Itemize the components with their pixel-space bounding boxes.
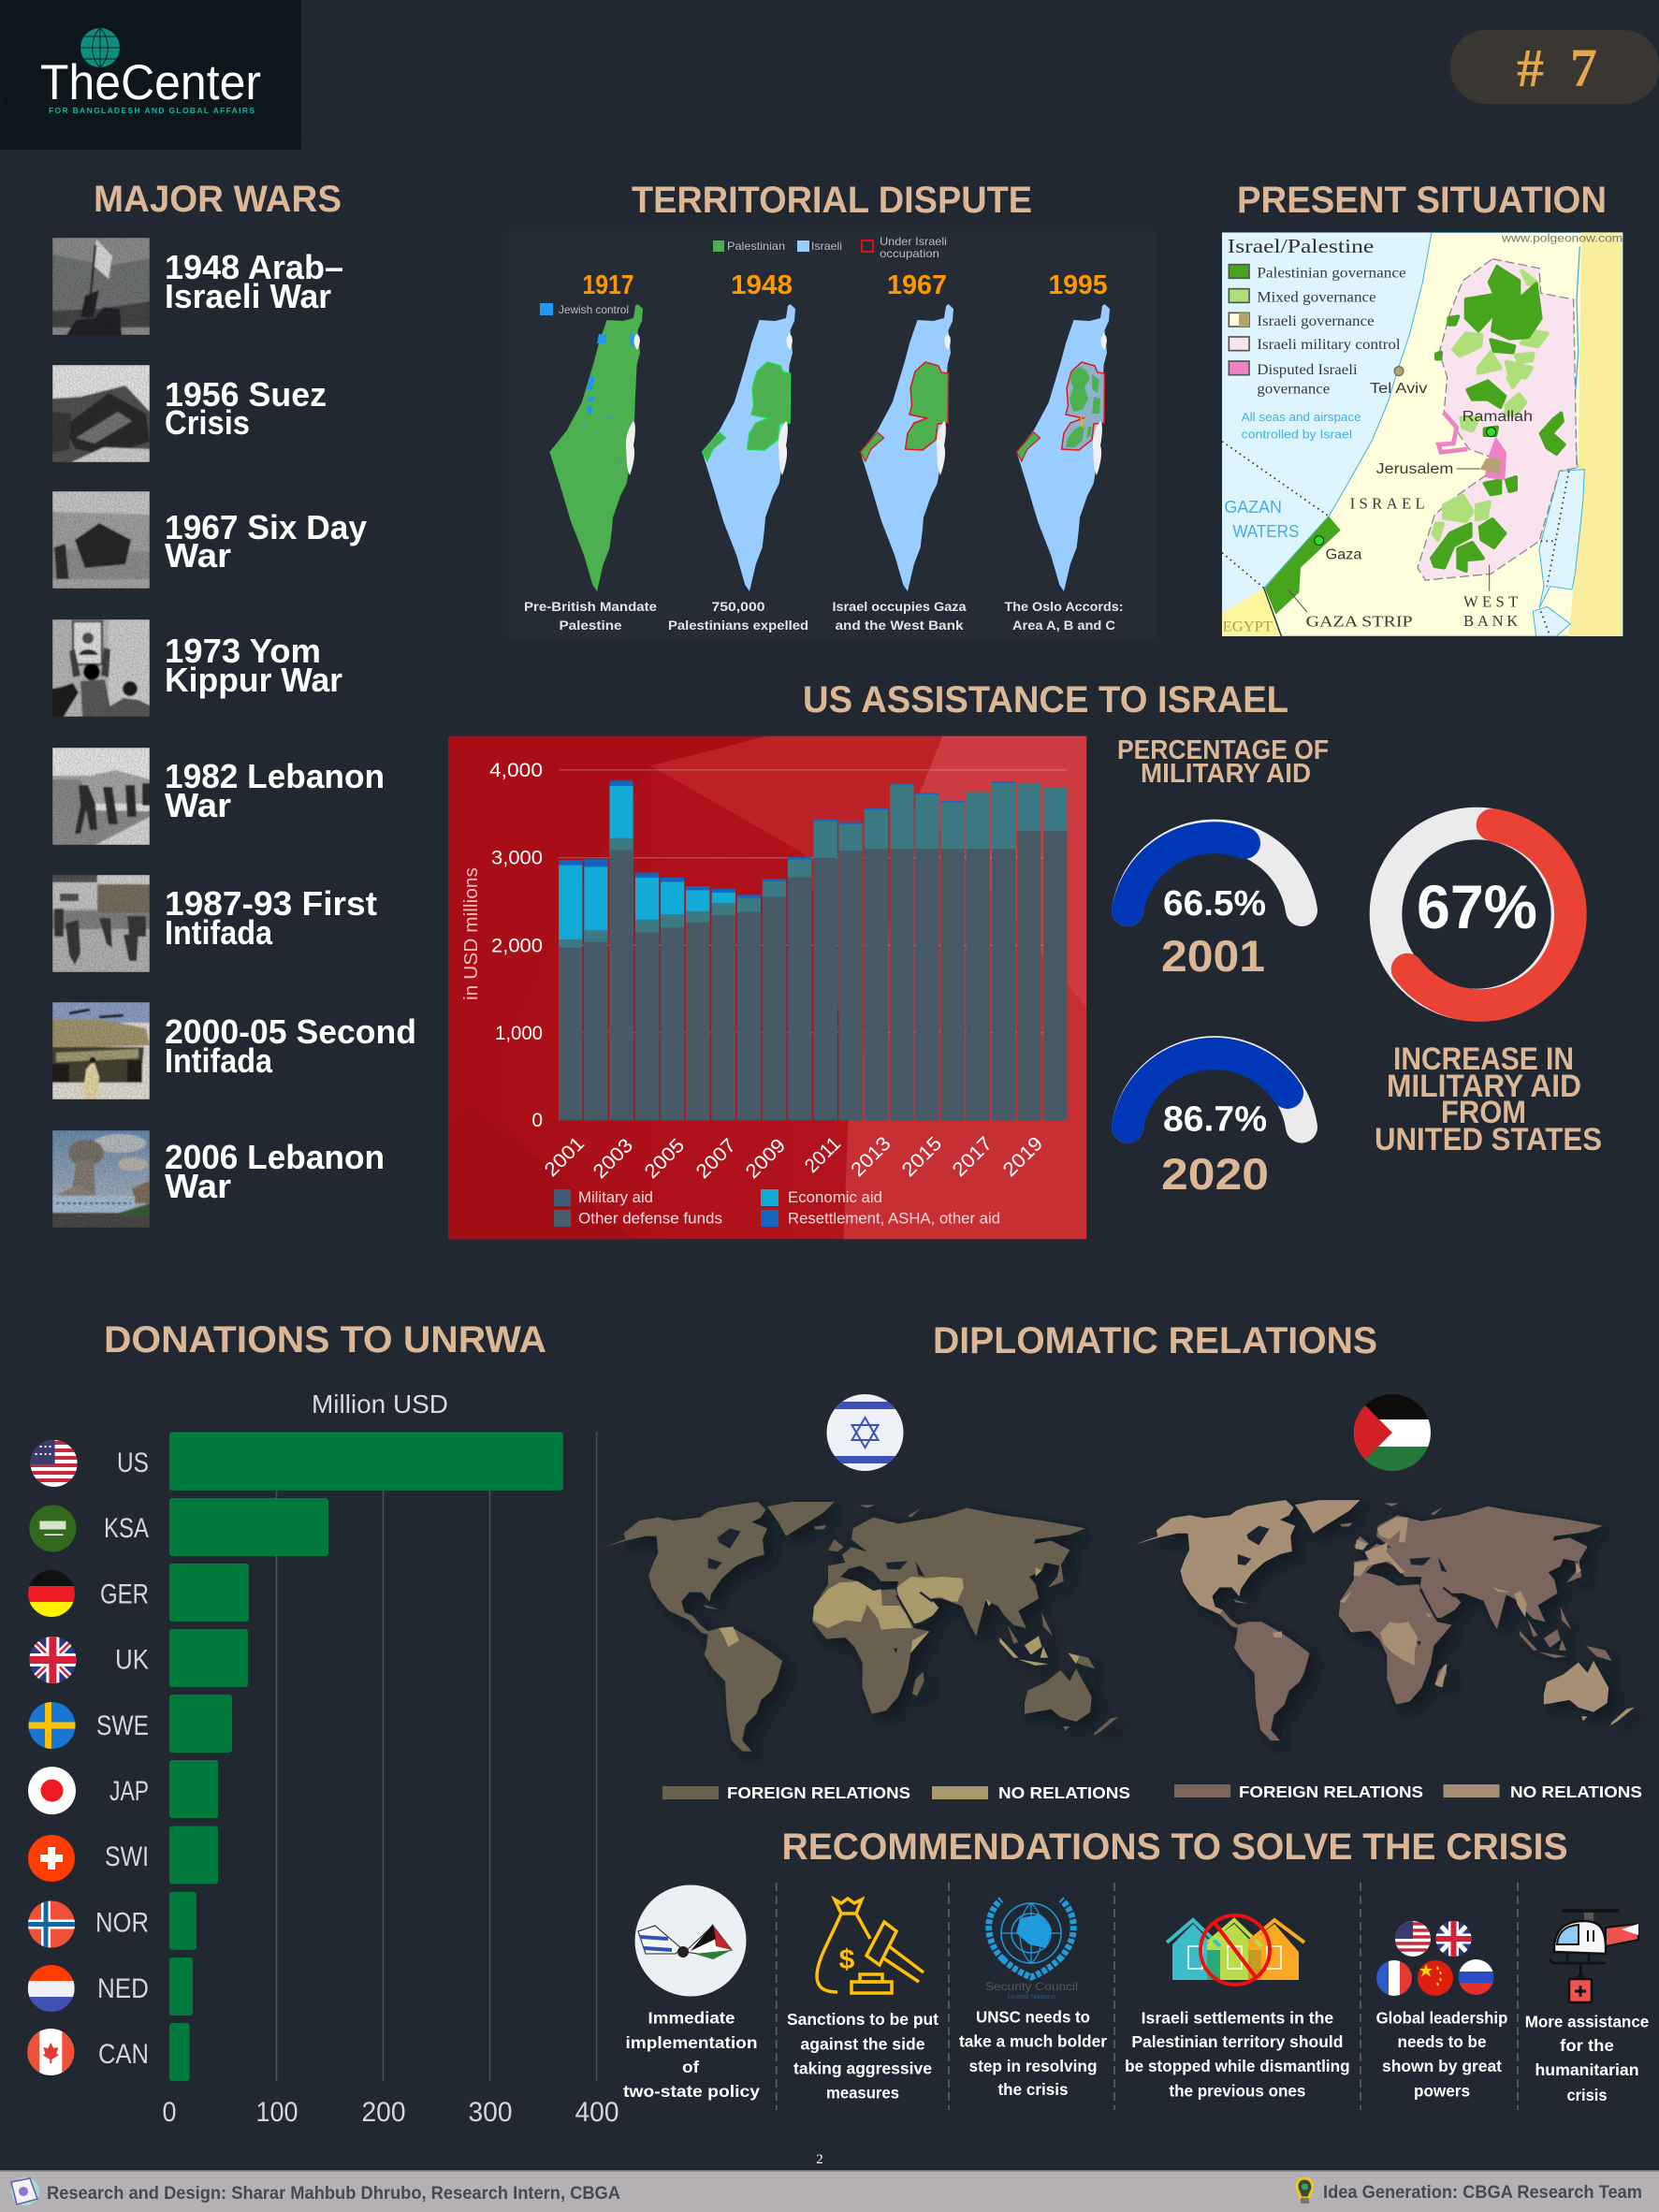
recommendation 5: global leadership [1376, 1921, 1507, 2101]
flag: Germany [28, 1570, 75, 1618]
world map: Israel relations [602, 1502, 1118, 1752]
flag: Sweden [28, 1702, 75, 1749]
chart axis labels: 2003 [589, 1135, 637, 1183]
war 2006: War [165, 1167, 231, 1205]
chart axis labels: 1,000 [495, 1023, 543, 1044]
map labels: WEST [1463, 593, 1518, 611]
map labels: Gaza [1326, 546, 1362, 562]
war 1987-93: 1987-93 First [165, 884, 377, 923]
map 1967: and the West Bank [835, 618, 964, 633]
map labels: Ramallah [1463, 409, 1533, 425]
map labels: Jerusalem [1376, 461, 1453, 477]
gauge: 2020: 2020 [1161, 1149, 1269, 1199]
icon: UN emblem: United Nations [1008, 1994, 1056, 2001]
heading: donations: DONATIONS TO UNRWA [104, 1319, 546, 1361]
recommendation 1: two-state policy: implementation [625, 2033, 758, 2052]
chart legend [554, 1188, 1000, 1228]
flag: Canada [27, 2029, 74, 2075]
gauge: 2001: 2001 [1161, 931, 1265, 981]
map 1967: 1967 [887, 270, 947, 300]
heading: present situation: PRESENT SITUATION [1237, 180, 1607, 221]
heading: major wars: MAJOR WARS [94, 179, 342, 220]
map 1917: Palestine [560, 618, 622, 633]
chart axis labels: 0 [531, 1110, 543, 1131]
chart legend: Economic aid [788, 1188, 882, 1206]
war 1982: War [165, 786, 231, 824]
issue badge [1450, 30, 1659, 104]
recommendation 2: sanctions: measures [826, 2084, 899, 2103]
logo: The Center: FOR BANGLADESH AND GLOBAL AFFAIRS [49, 106, 255, 115]
chart axis labels: 4,000 [489, 760, 543, 781]
recommendation 5: global leadership: shown by great [1382, 2057, 1502, 2075]
flag: Norway [28, 1901, 75, 1948]
country labels: CAN [98, 2039, 149, 2070]
map 1948: 1948 [731, 270, 793, 300]
map 1995 [1005, 270, 1123, 633]
caption: increase in military aid: MILITARY AID [1387, 1069, 1581, 1104]
recommendation 4: settlements: be stopped while dismantling [1125, 2057, 1350, 2075]
map labels [1223, 231, 1623, 634]
chart axis labels: 2019 [999, 1133, 1047, 1181]
war 2006 [52, 1130, 385, 1228]
map labels: Palestinian governance [1257, 266, 1406, 282]
icon: great power flags [1376, 1921, 1493, 1996]
war 1982 [52, 748, 385, 845]
icon: UN emblem [985, 1899, 1078, 2001]
map labels: GAZA STRIP [1306, 612, 1413, 630]
chart legend: Military aid [578, 1188, 653, 1206]
country labels: KSA [104, 1513, 149, 1544]
icon: UN emblem: Security Council [985, 1980, 1078, 1993]
war 1948 [52, 238, 343, 335]
map labels: controlled by Israel [1242, 429, 1352, 442]
map 1948 [668, 270, 808, 633]
chart axis labels [461, 760, 1047, 1183]
tick labels: 300 [468, 2097, 513, 2128]
legend: Palestine relations [1174, 1783, 1642, 1801]
chart axis labels: 2017 [949, 1133, 997, 1181]
flag: Japan [28, 1767, 76, 1814]
panel: territorial dispute maps [508, 231, 1156, 638]
war 1967 [52, 491, 367, 589]
recommendation 3: UNSC: step in resolving [969, 2057, 1097, 2075]
flag: Netherlands [28, 1965, 75, 2013]
logo: The Center: TheCenter [40, 55, 261, 110]
recommendation 1: two-state policy [623, 1885, 760, 2101]
recommendation 1: two-state policy: two-state policy [623, 2082, 760, 2101]
donut: 67 percent increase: 67% [1417, 872, 1537, 941]
issue badge: # 7 [1517, 37, 1597, 98]
subheading: percentage of military aid: PERCENTAGE OF [1117, 735, 1329, 765]
recommendation 4: settlements: Israeli settlements in the [1142, 2009, 1333, 2028]
recommendation 5: global leadership: Global leadership [1376, 2009, 1507, 2028]
flag: US [31, 1440, 78, 1487]
chart axis labels: 2001 [541, 1133, 589, 1181]
legend swatches [1229, 265, 1249, 375]
map labels: EGYPT [1223, 618, 1273, 634]
map 1995: The Oslo Accords: [1005, 600, 1123, 614]
war 1956: Crisis [165, 403, 250, 442]
flag: Palestine [1354, 1394, 1431, 1472]
recommendation 3: UNSC: take a much bolder [959, 2032, 1107, 2051]
caption: increase in military aid: INCREASE IN [1393, 1041, 1574, 1077]
war 1948: 1948 Arab– [165, 248, 343, 286]
recommendation 3: UNSC: UNSC needs to [976, 2008, 1090, 2027]
country labels [95, 1448, 149, 2070]
war 1956: 1956 Suez [165, 375, 327, 414]
legend: Israel relations: FOREIGN RELATIONS [727, 1783, 910, 1802]
flag: UK [29, 1637, 76, 1683]
recommendation 4: settlements: the previous ones [1169, 2082, 1306, 2101]
gauge: 2001 [1128, 836, 1302, 981]
caption: increase in military aid: UNITED STATES [1375, 1122, 1602, 1157]
map labels: Israeli governance [1257, 313, 1375, 329]
tick labels: 400 [575, 2097, 619, 2128]
legend: Palestine relations: FOREIGN RELATIONS [1239, 1783, 1423, 1801]
map labels: governance [1257, 381, 1331, 397]
legend: Palestine relations: NO RELATIONS [1510, 1783, 1642, 1801]
icon: helicopter with aid box [1550, 1911, 1638, 2002]
map labels: GAZAN [1224, 497, 1282, 517]
icon: money bag and gavel [817, 1899, 924, 1993]
recommendation 3: UNSC: the crisis [997, 2080, 1069, 2099]
war 1967: 1967 Six Day [165, 508, 367, 546]
map 1967: Israel occupies Gaza [833, 600, 967, 614]
caption: increase in military aid: FROM [1441, 1095, 1526, 1130]
country labels: GER [100, 1579, 149, 1609]
map labels: Disputed Israeli [1257, 362, 1358, 378]
world map: Palestine relations [1135, 1500, 1635, 1740]
gauge: 2001: 66.5% [1163, 884, 1266, 924]
map labels: All seas and airspace [1242, 411, 1361, 424]
map: present situation [1222, 231, 1623, 636]
legend: Israel relations: NO RELATIONS [998, 1783, 1130, 1802]
recommendation 1: two-state policy: Immediate [648, 2009, 735, 2028]
page number: 2 [816, 2152, 823, 2167]
footer: Research and Design: Sharar Mahbub Dhrubo, Research Intern, CBGA [47, 2184, 620, 2204]
map labels: Tel Aviv [1370, 381, 1428, 397]
map 1948: Palestinians expelled [668, 618, 808, 633]
chart axis labels: 2007 [692, 1135, 740, 1183]
recommendation 6: humanitarian assistance: humanitarian [1535, 2060, 1639, 2079]
recommendation 3: UNSC [959, 1899, 1107, 2099]
flag: Saudi Arabia [29, 1505, 76, 1551]
tick labels: 100 [256, 2097, 298, 2128]
caption: increase in military aid [1375, 1041, 1602, 1157]
recommendation 6: humanitarian assistance: crisis [1566, 2086, 1608, 2104]
country labels: NOR [95, 1907, 149, 1939]
bars [169, 1432, 563, 2081]
flag: Israel [827, 1394, 904, 1471]
map 1917 [524, 270, 658, 633]
map legend [713, 235, 947, 260]
war 1982: 1982 Lebanon [165, 757, 385, 795]
chart: us assistance stacked bars [448, 736, 1086, 1239]
recommendation 2: sanctions: Sanctions to be put [787, 2010, 939, 2029]
war 2000-05 [52, 1002, 416, 1099]
subheading: percentage of military aid: MILITARY AID [1141, 759, 1311, 789]
recommendation 6: humanitarian assistance: More assistance [1525, 2013, 1650, 2031]
recommendation 5: global leadership: powers [1414, 2082, 1470, 2101]
recommendation 2: sanctions: taking aggressive [793, 2059, 932, 2078]
map labels: www.polgeonow.com [1501, 231, 1623, 244]
donut: 67 percent increase [1386, 823, 1570, 1006]
recommendation 2: sanctions [787, 1899, 939, 2103]
map labels: Mixed governance [1257, 290, 1376, 306]
map labels: Israeli military control [1257, 337, 1401, 353]
footer [0, 2170, 1659, 2212]
war 1956 [52, 365, 327, 462]
war 1948: Israeli War [165, 277, 331, 315]
map legend: Under Israeli [880, 235, 947, 248]
war 1967: War [165, 536, 231, 575]
chart axis labels: in USD millions [461, 867, 482, 1000]
chart axis labels: 2005 [641, 1135, 689, 1183]
map labels: Israel/Palestine [1228, 237, 1374, 257]
recommendation 4: settlements [1125, 1915, 1350, 2101]
gauge: 2020: 86.7% [1163, 1100, 1267, 1140]
map labels: WATERS [1232, 521, 1299, 541]
war 1987-93: Intifada [165, 913, 273, 952]
chart axis labels: 2013 [847, 1133, 895, 1181]
map 1948: 750,000 [711, 600, 765, 614]
tick labels: 200 [361, 2097, 406, 2128]
icon: houses with prohibition sign [1167, 1915, 1304, 1985]
country labels: JAP [109, 1776, 149, 1807]
icon: handshake flags [634, 1885, 747, 1997]
recommendation 5: global leadership: needs to be [1398, 2032, 1487, 2051]
subheading: percentage of military aid [1117, 735, 1329, 789]
icon: report [11, 2177, 39, 2205]
recommendation 1: two-state policy: of [682, 2058, 699, 2076]
chart: donations to UNRWA: Million USD [312, 1390, 448, 1419]
map 1967 [833, 270, 967, 633]
war 1987-93 [52, 875, 377, 972]
map 1995: 1995 [1048, 270, 1108, 300]
map 1917: Pre-British Mandate [524, 600, 658, 614]
war 2000-05: Intifada [165, 1041, 273, 1080]
war 1973: 1973 Yom [165, 632, 321, 670]
chart: donations to UNRWA [27, 1390, 619, 2128]
tick labels: 0 [163, 2097, 176, 2128]
map legend: Israeli [811, 240, 842, 253]
war 1973: Kippur War [165, 661, 342, 699]
footer: Idea Generation: CBGA Research Team [1323, 2183, 1642, 2203]
war 1973 [52, 619, 342, 717]
map 1917: Jewish control [559, 303, 629, 316]
war 2000-05: 2000-05 Second [165, 1012, 416, 1051]
chart axis labels: 2009 [742, 1135, 790, 1183]
recommendation 6: humanitarian assistance: for the [1560, 2036, 1614, 2055]
panel: major wars list [52, 238, 416, 1228]
heading: territorial dispute: TERRITORIAL DISPUTE [632, 180, 1032, 221]
chart axis labels: 2,000 [491, 936, 543, 956]
map legend: occupation [880, 247, 939, 260]
recommendation 4: settlements: Palestinian territory should [1131, 2032, 1343, 2051]
map 1917: 1917 [582, 270, 634, 300]
country labels: SWE [96, 1710, 149, 1741]
country labels: US [117, 1448, 149, 1478]
chart legend: Other defense funds [578, 1209, 722, 1228]
heading: diplomatic relations: DIPLOMATIC RELATIONS [933, 1320, 1377, 1361]
map labels: BANK [1463, 612, 1518, 630]
heading: recommendations: RECOMMENDATIONS TO SOLVE THE CRISIS [782, 1826, 1568, 1868]
legend: Israel relations [662, 1783, 1130, 1802]
heading: us assistance: US ASSISTANCE TO ISRAEL [803, 679, 1288, 720]
gauge: 2020 [1128, 1052, 1302, 1199]
chart axis labels: 2011 [801, 1133, 845, 1177]
chart axis labels: 3,000 [491, 848, 543, 869]
war 2006: 2006 Lebanon [165, 1138, 385, 1176]
map legend: Palestinian [727, 240, 785, 253]
tick labels [163, 2097, 619, 2128]
logo: The Center [0, 0, 301, 150]
recommendation 2: sanctions: against the side [801, 2035, 925, 2054]
country labels: NED [97, 1973, 149, 2004]
icon: light bulb [1297, 2178, 1313, 2204]
chart axis labels: 2015 [898, 1133, 946, 1181]
map labels: ISRAEL [1350, 494, 1425, 512]
icon: money bag and gavel: $ [839, 1944, 855, 1975]
country labels: UK [115, 1645, 149, 1675]
map 1995: Area A, B and C [1012, 618, 1115, 633]
country labels: SWI [105, 1841, 149, 1872]
flag: Switzerland [28, 1835, 75, 1882]
recommendation 6: humanitarian assistance [1525, 1911, 1650, 2104]
chart legend: Resettlement, ASHA, other aid [788, 1209, 1000, 1228]
